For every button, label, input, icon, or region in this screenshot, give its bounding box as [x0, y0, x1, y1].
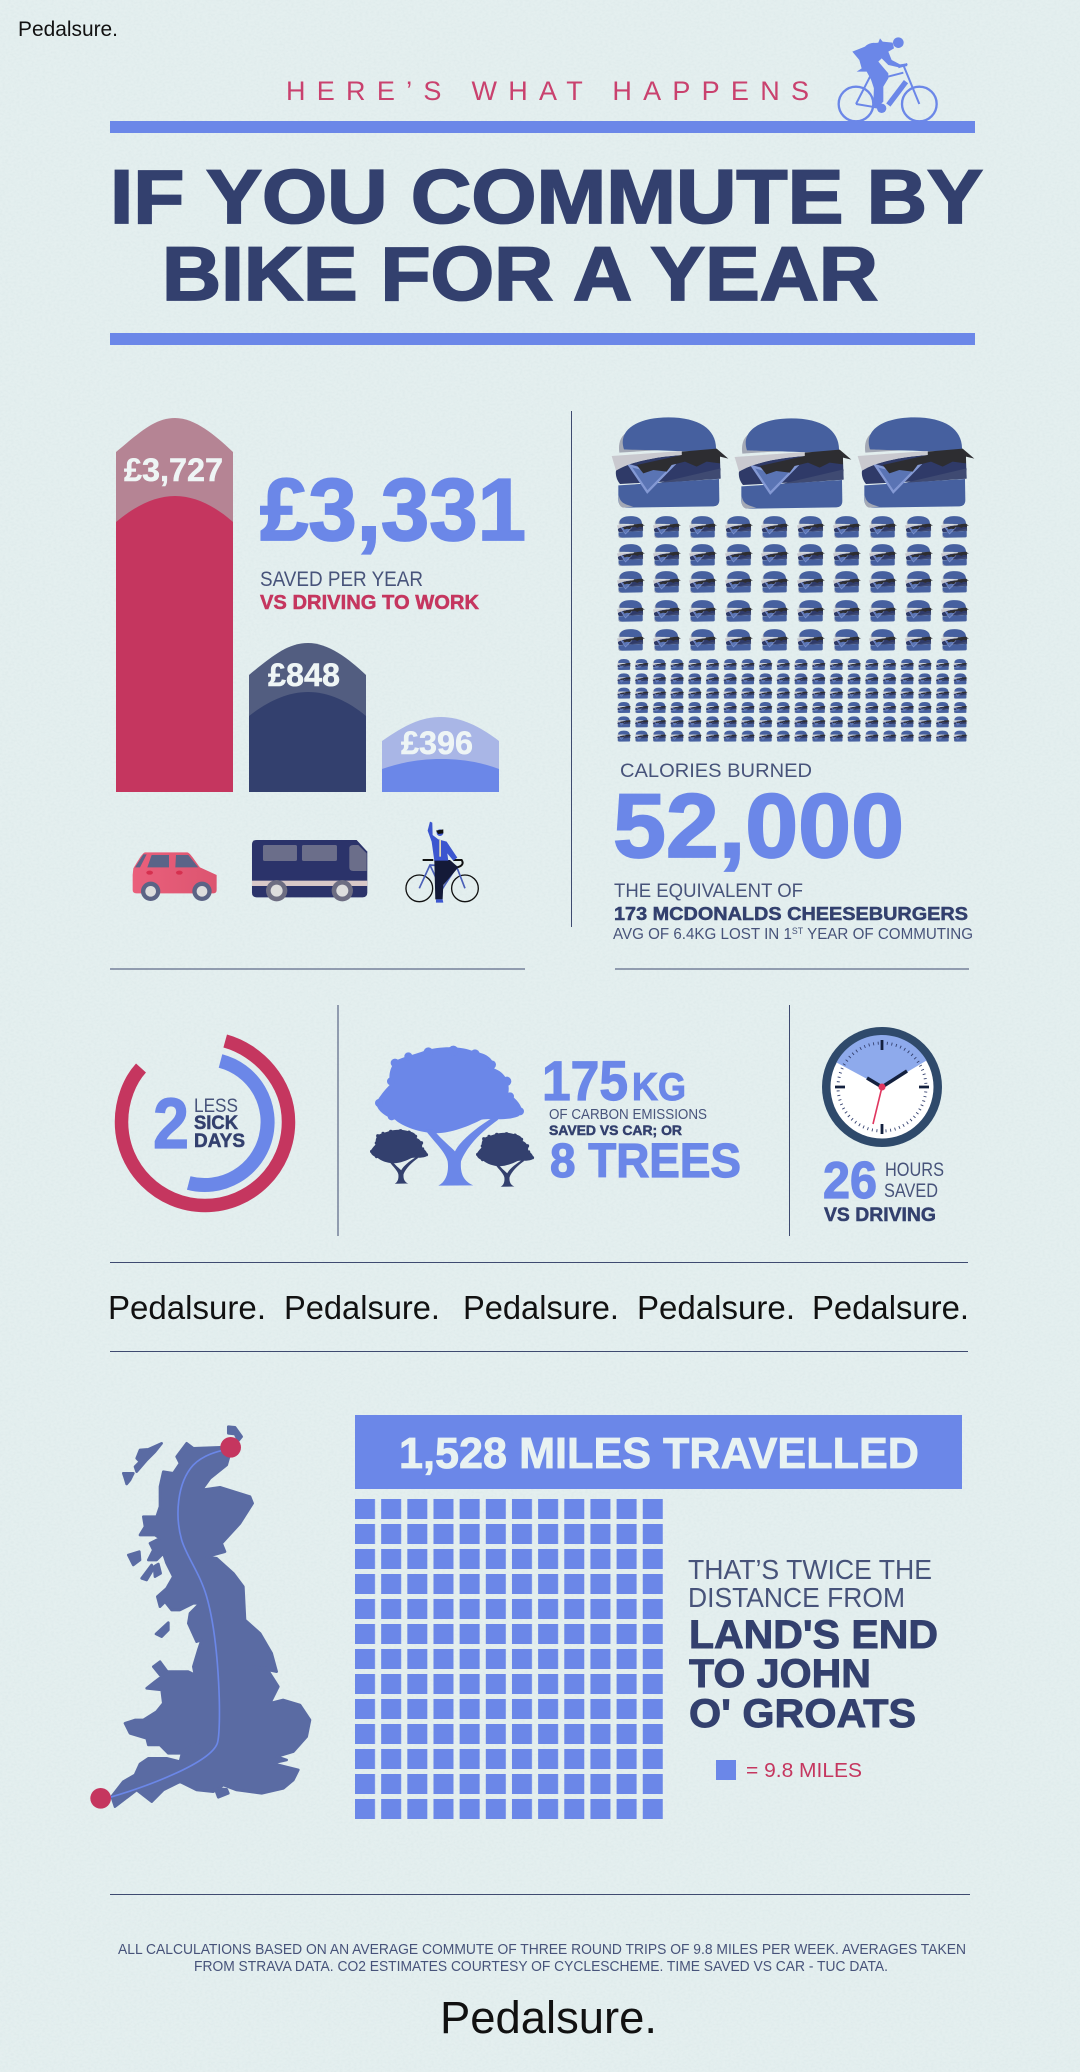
- text: twice the distance: THAT’S TWICE THE: [688, 1554, 932, 1585]
- icon: bus: [252, 840, 367, 901]
- map: landmass: [112, 1427, 310, 1807]
- bar: bike: £396: [401, 725, 473, 761]
- logo strip: Pedalsure.: [637, 1289, 795, 1326]
- logo strip: Pedalsure.: [463, 1289, 619, 1326]
- divider bar: bottom: [110, 333, 975, 345]
- stat: calories burned: 52,000: [613, 776, 904, 877]
- text: twice the distance: DISTANCE FROM: [688, 1582, 905, 1613]
- icon: clock: [822, 1027, 942, 1147]
- text: twice the distance: O' GROATS: [689, 1692, 916, 1736]
- text: twice the distance: LAND'S END: [689, 1613, 938, 1657]
- stat: carbon emissions: OF CARBON EMISSIONS: [549, 1106, 707, 1123]
- bar: bus: £848: [268, 657, 340, 693]
- map: UK with route: [90, 1427, 310, 1809]
- divider: vertical: [571, 411, 572, 927]
- banner: miles travelled: [355, 1415, 962, 1489]
- banner: miles travelled: 1,528 MILES TRAVELLED: [399, 1429, 919, 1478]
- text: twice the distance: [688, 1554, 938, 1736]
- stat: calories burned: YEAR OF COMMUTING: [803, 926, 973, 943]
- text: twice the distance: TO JOHN: [689, 1652, 871, 1696]
- stat: money saved: SAVED PER YEAR: [260, 568, 423, 591]
- stat: calories burned: AVG OF 6.4KG LOST IN 1: [613, 926, 796, 943]
- stat: money saved: [260, 460, 526, 614]
- footnote: FROM STRAVA DATA. CO2 ESTIMATES COURTESY OF CYCLESCHEME. TIME SAVED VS CAR - TUC DATA.: [194, 1959, 888, 1975]
- stat: calories burned: THE EQUIVALENT OF: [614, 881, 803, 902]
- stat: calories burned: [613, 761, 973, 943]
- map: John O' Groats marker: [220, 1437, 241, 1458]
- divider bar: top: [110, 121, 975, 133]
- logo strip: Pedalsure.: [812, 1289, 969, 1326]
- legend: = 9.8 MILES: [746, 1760, 862, 1782]
- footnote: [118, 1942, 966, 1975]
- logo strip: Pedalsure.: [284, 1289, 440, 1326]
- icon: trees: [370, 1046, 534, 1187]
- icon: car: [133, 852, 217, 901]
- stat: carbon emissions: 175: [542, 1049, 628, 1112]
- stat: sick days ring: DAYS: [194, 1131, 245, 1152]
- stat: hours saved: HOURS: [885, 1160, 944, 1181]
- kicker heading: HERE’S WHAT HAPPENS: [286, 76, 809, 106]
- stat: hours saved: SAVED: [884, 1181, 938, 1202]
- icon: small burgers: [617, 659, 967, 742]
- stat: hours saved: VS DRIVING: [824, 1205, 936, 1226]
- icon: cyclist: [839, 37, 937, 121]
- bar: car: £3,727: [124, 452, 223, 488]
- stat: sick days ring: [122, 1041, 288, 1206]
- stat: carbon emissions: SAVED VS CAR; OR: [549, 1122, 682, 1138]
- logo: footer: Pedalsure.: [440, 1992, 657, 2043]
- icon: commuter with bike: [406, 822, 478, 903]
- stat: carbon emissions: 8 TREES: [550, 1135, 741, 1188]
- stat: carbon emissions: KG: [632, 1066, 686, 1109]
- bar: bus: [249, 643, 366, 792]
- stat: money saved: VS DRIVING TO WORK: [260, 592, 480, 614]
- stat: money saved: £3,331: [260, 460, 526, 559]
- pictogram: square grid of trips: [355, 1499, 663, 1819]
- stat: sick days ring: LESS: [194, 1096, 238, 1117]
- icon: large burgers: [612, 417, 974, 509]
- title: [110, 155, 983, 317]
- stat: carbon emissions: [542, 1049, 741, 1188]
- icon: medium burgers: [617, 516, 969, 651]
- logo strip: [108, 1289, 969, 1326]
- footnote: ALL CALCULATIONS BASED ON AN AVERAGE COMMUTE OF THREE ROUND TRIPS OF 9.8 MILES PER WEEK. AVERAGES TAKEN: [118, 1942, 966, 1958]
- bar chart: annual commuting cost: [116, 418, 499, 792]
- map: Land's End marker: [90, 1788, 111, 1809]
- stat: sick days ring: SICK: [194, 1113, 238, 1134]
- bar: car: [116, 418, 233, 792]
- burger pictogram: calories as cheeseburgers: [612, 417, 974, 742]
- logo: top left: Pedalsure.: [18, 18, 118, 41]
- stat: calories burned: CALORIES BURNED: [620, 761, 812, 782]
- stat: calories burned: ST: [792, 926, 804, 936]
- stat: hours saved: [823, 1152, 944, 1226]
- bar: bike: [382, 717, 499, 792]
- map: route line: [110, 1449, 227, 1797]
- stat: hours saved: 26: [823, 1152, 877, 1210]
- stat: calories burned: 173 MCDONALDS CHEESEBURGERS: [614, 904, 968, 924]
- title: BIKE FOR A YEAR: [162, 232, 878, 317]
- logo strip: Pedalsure.: [108, 1289, 266, 1326]
- title: IF YOU COMMUTE BY: [110, 155, 983, 240]
- stat: sick days ring: 2: [153, 1085, 189, 1164]
